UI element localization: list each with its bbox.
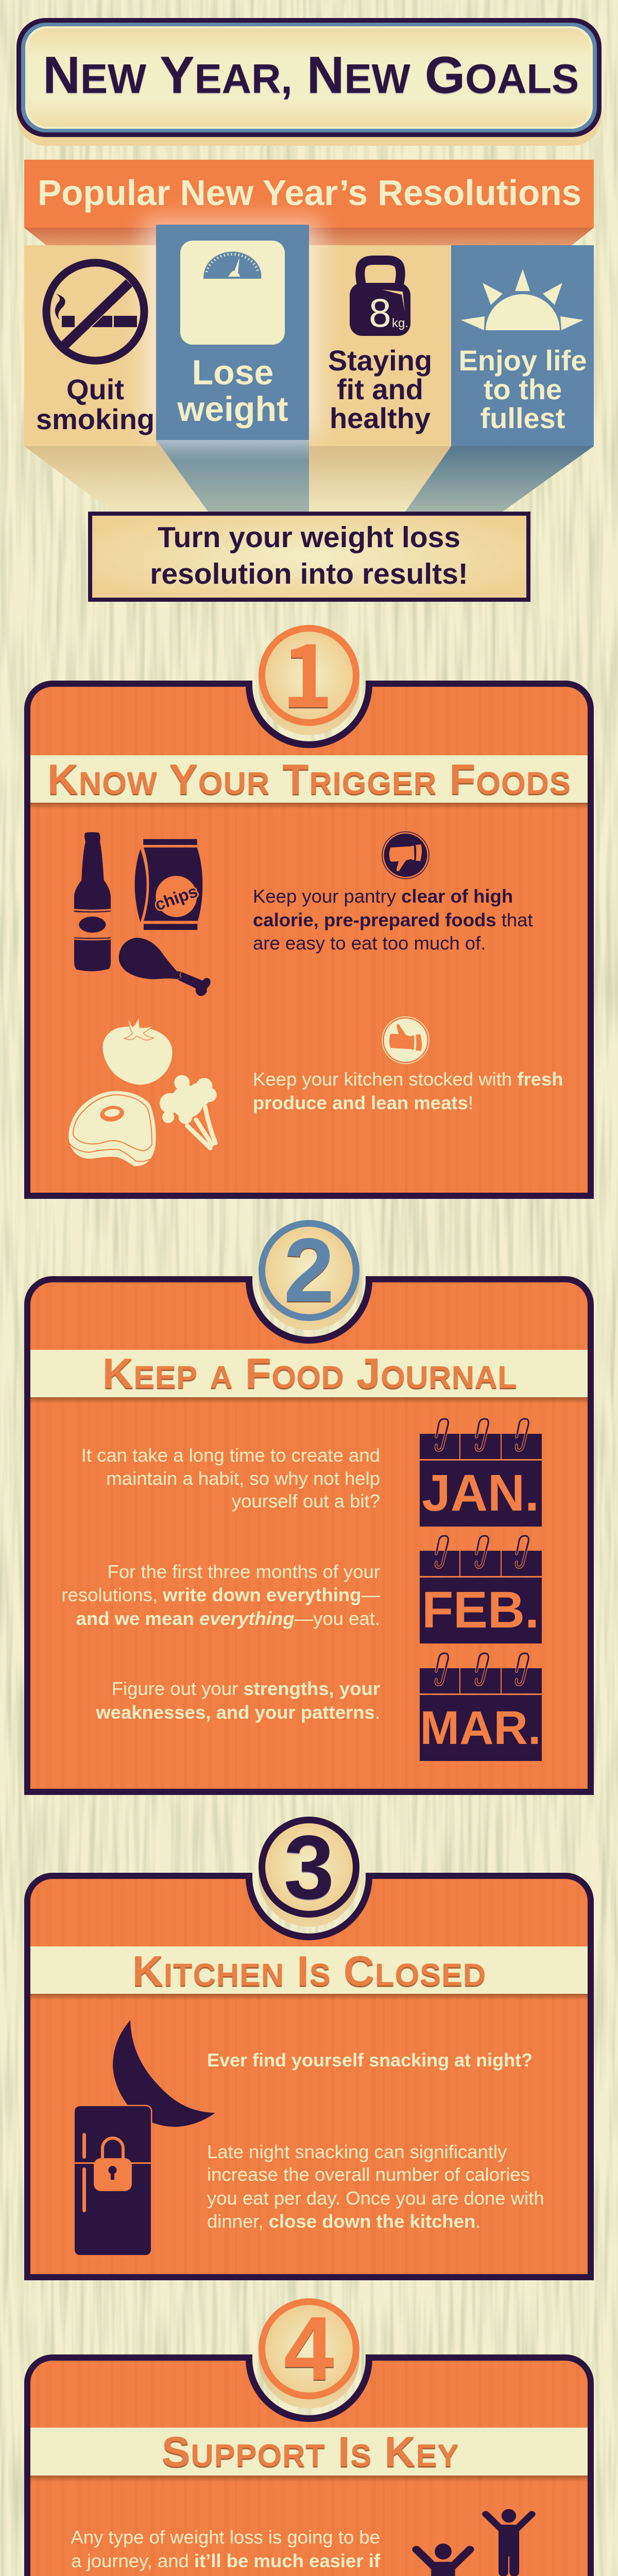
panel: step 1 [24,606,594,1199]
number badge 2 [259,1220,359,1330]
heading band [30,1349,588,1403]
text: pantry: Keep your pantry clear of high [253,886,513,907]
column: lose weight [156,225,309,440]
column: lose weight: Lose [192,353,273,392]
panel frame [24,1276,594,1795]
text: late night snacking: dinner, close down the kitchen. [207,2211,480,2232]
icon: tomato, steak, broccoli [68,1016,217,1166]
heading band: KNOW YOUR TRIGGER FOODS [47,755,571,803]
text: write down everything: For the first three months of your [108,1561,380,1582]
column: enjoy life: Enjoy life [459,344,587,377]
callout: turn your weight loss: Turn your weight loss [158,521,460,554]
heading band: KITCHEN IS CLOSED [132,1947,486,1995]
panel: step 2 [24,1220,594,1795]
icon: bottle, chips, drumstick [74,832,211,996]
heading band [30,2428,588,2482]
heading band: SUPPORT IS KEY [162,2428,459,2476]
panel frame [24,1873,594,2280]
title text: NEW YEAR, NEW GOALS [43,46,579,104]
heading band: KEEP A FOOD JOURNAL [102,1349,517,1397]
panel: step 3 [24,1817,594,2280]
column: enjoy life: to the [484,373,562,405]
title banner [16,18,602,146]
text: pantry: calorie, pre-prepared foods that [253,909,533,930]
text: kitchen stocked: Keep your kitchen stocked with fresh [253,1069,563,1090]
panel: popular resolutions [24,160,594,512]
column: enjoy life [451,245,594,446]
perspective shadows under columns [24,440,594,512]
calendar: February [420,1536,542,1643]
number badge 1: 1 [282,606,333,733]
callout: turn your weight loss: resolution into results! [150,557,468,590]
panel frame [24,681,594,1199]
text: habit: maintain a habit, so why not help [106,1468,380,1489]
icon: thumbs up [382,1017,429,1063]
icon: no smoking [46,263,144,361]
icon: bottle, chips, drumstick: chips [152,882,200,914]
icon: moon and locked fridge [75,2020,215,2255]
text: kitchen stocked: produce and lean meats! [253,1092,473,1113]
label: staying fit and healthy: Staying [328,344,432,377]
heading band [30,1946,588,2000]
icon: thumbs down [382,832,429,879]
highlight glow [143,219,321,435]
icon: kettlebell: 8 [369,290,391,335]
icon: group of people [406,2509,555,2576]
text: habit: yourself out a bit? [232,1490,380,1512]
text: habit: It can take a long time to create and [81,1445,380,1466]
text: journey: a journey, and it’ll be much easier if [71,2550,380,2571]
calendar: March [420,1653,542,1761]
text: late night snacking: increase the overall number of calories [207,2164,530,2185]
panel: step 4 [24,2298,594,2576]
panel frame [24,2354,594,2576]
text: snacking question: Ever find yourself snacking at night? [207,2049,533,2071]
calendar: February: FEB. [422,1581,539,1639]
column: quit smoking [24,245,451,446]
label: quit smoking: Quit [66,373,124,405]
column: lose weight: weight [177,389,288,429]
text: pantry: are easy to eat too much of. [253,933,486,954]
number badge 3 [259,1817,359,1927]
label: staying fit and healthy: fit and [337,373,423,405]
number badge 4: 4 [284,2298,334,2399]
text: journey: Any type of weight loss is going to be [71,2527,380,2548]
text: write down everything: and we mean everything—you eat. [76,1608,380,1629]
text: late night snacking: Late night snacking can significantly [207,2141,507,2162]
icon: kettlebell: kg. [392,316,408,330]
column: enjoy life: fullest [480,402,565,434]
calendar: January: JAN. [422,1464,539,1522]
number badge 4 [259,2298,359,2409]
calendar: January [420,1419,542,1527]
text: late night snacking: you eat per day. Once you are done with [207,2188,544,2209]
label: quit smoking: smoking [36,403,154,435]
text: strengths: weaknesses, and your patterns. [96,1702,380,1723]
calendar: March: MAR. [420,1702,541,1754]
orange header banner: Popular New Year’s Resolutions [38,173,581,213]
number badge 3: 3 [284,1817,334,1918]
number badge 1 [259,606,359,735]
text: strengths: Figure out your strengths, your [112,1678,380,1699]
label: staying fit and healthy: healthy [330,402,431,434]
text: write down everything: resolutions, write down everything— [61,1584,380,1605]
callout: turn your weight loss [90,514,528,600]
orange header banner [24,160,594,245]
icon: kettlebell [350,260,410,336]
number badge 2: 2 [284,1220,334,1321]
